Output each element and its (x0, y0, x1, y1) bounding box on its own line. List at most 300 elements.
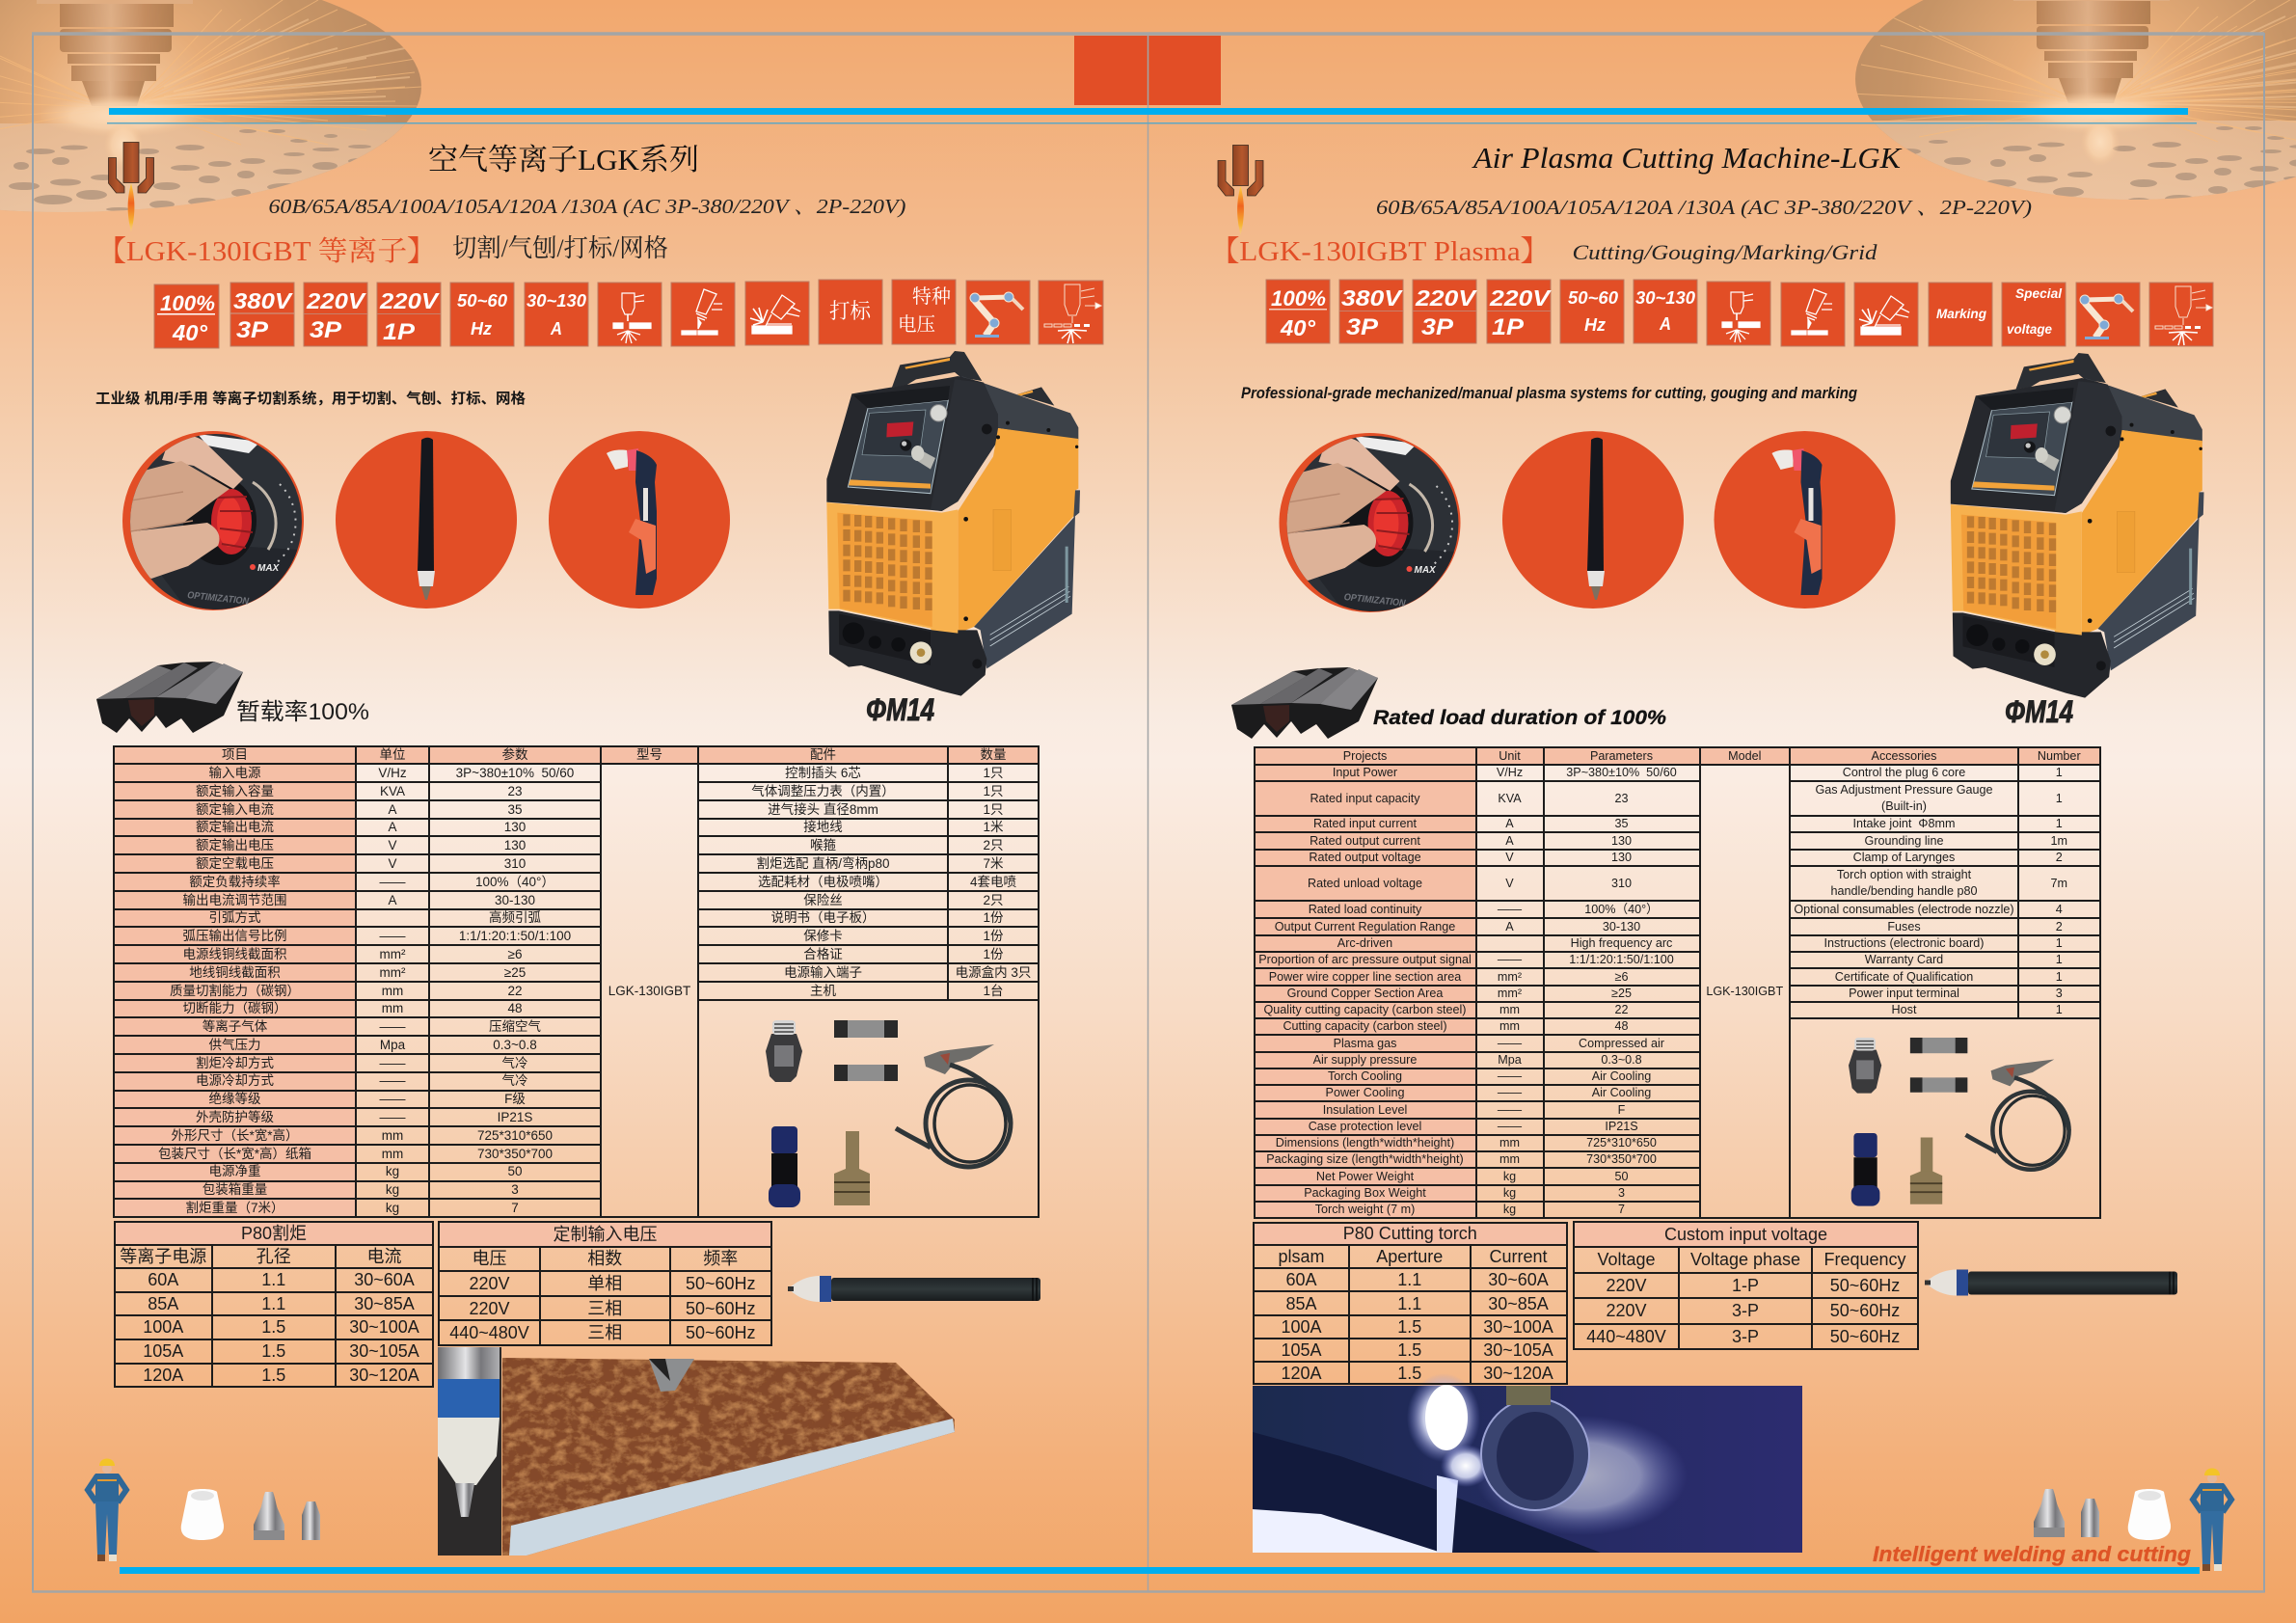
table: specifications Chinese: 额定输出电压 (196, 838, 274, 852)
table: specifications English: F (1618, 1103, 1625, 1117)
feature circle: knob left (122, 429, 309, 617)
table: custom voltage English: Custom input voltage (1664, 1225, 1827, 1244)
table: custom voltage Chinese: 相数 (587, 1249, 622, 1268)
table: specifications Chinese: 弧压输出信号比例 (183, 929, 287, 943)
table: specifications English: —— (1498, 1069, 1522, 1083)
table: specifications Chinese: 电源净重 (208, 1164, 260, 1178)
table: P80 torch Chinese (114, 1221, 434, 1388)
icon: 220V 3P: 3P (310, 317, 342, 343)
icon row left: duty cycle (154, 284, 219, 348)
table: specifications English: Power input terminal (1849, 987, 1959, 1000)
subtitle: English page: 60B/65A/85A/100A/105A/120A /130A (AC 3P-380/220V 、2P-220V) (1376, 196, 2032, 219)
table: specifications English: 1 (2056, 766, 2063, 779)
table: specifications Chinese: 1只 (983, 766, 1003, 780)
table: specifications English: Clamp of Larynges (1853, 851, 1955, 864)
table: custom voltage Chinese: 定制输入电压 (554, 1225, 658, 1244)
table: specifications English: Number (2038, 749, 2081, 763)
table: specifications Chinese: 割炬重量（7米） (185, 1201, 284, 1215)
table: custom voltage Chinese: 50~60Hz (686, 1323, 756, 1342)
table: specifications Chinese: 电源盒内 3只 (956, 965, 1031, 980)
table: specifications English: 2 (2056, 851, 2063, 864)
table: P80 torch English: 30~120A (1483, 1364, 1553, 1383)
table: specifications Chinese: mm (382, 1001, 403, 1015)
table: specifications Chinese: IP21S (498, 1110, 532, 1124)
table: specifications Chinese: 输出电流调节范围 (183, 893, 287, 907)
table: specifications Chinese: 保修卡 (803, 929, 843, 943)
table: specifications Chinese: 配件 (810, 747, 836, 762)
table: P80 torch English: 1.5 (1397, 1364, 1421, 1383)
table: specifications English: mm (1499, 1019, 1520, 1033)
table: specifications English: Cutting capacity (carbon steel) (1283, 1019, 1447, 1033)
icon: 220V 1P (1487, 280, 1552, 343)
table: specifications Chinese: A (388, 893, 397, 907)
table: specifications English: Output Current Regulation Range (1275, 920, 1455, 933)
icon: current range: 30~130 (527, 291, 586, 311)
table: P80 torch Chinese: 100A (143, 1317, 183, 1337)
table: specifications Chinese: —— (380, 1056, 405, 1070)
table: custom voltage English: 220V (1606, 1276, 1647, 1295)
table: specifications English: Case protection level (1309, 1120, 1421, 1133)
feature circle: hand torch right (1715, 431, 1896, 609)
table: P80 torch English: 100A (1281, 1317, 1322, 1337)
table: specifications English: (Built-in) (1881, 799, 1927, 813)
table: custom voltage Chinese: 440~480V (449, 1323, 529, 1342)
icon: robot arm (966, 281, 1030, 344)
table: P80 torch Chinese: 1.5 (261, 1317, 285, 1337)
cut steel blocks left (96, 662, 243, 733)
table: specifications English: Optional consumables (electrode nozzle) (1794, 903, 2014, 916)
table: specifications Chinese: 等离子气体 (203, 1019, 267, 1034)
table: custom voltage Chinese: 三相 (587, 1323, 622, 1342)
table: specifications Chinese: 7米 (983, 856, 1003, 871)
table: specifications English: kg (1503, 1203, 1516, 1216)
table: specifications Chinese: 35 (507, 802, 523, 817)
icon: 380V 3P: 380V (233, 288, 293, 313)
table: specifications English: High frequency arc (1571, 936, 1672, 950)
table: specifications English: Torch option with straight (1837, 868, 1971, 881)
table: P80 torch English (1253, 1222, 1568, 1385)
table: custom voltage Chinese (438, 1221, 772, 1346)
feature circle: straight torch right (1502, 431, 1684, 609)
table: specifications English: kg (1503, 1170, 1516, 1183)
table: specifications English: 130 (1611, 851, 1632, 864)
icon: gouging (1781, 283, 1845, 346)
slogan: Intelligent welding and cutting (1873, 1542, 2192, 1566)
table: P80 torch English: Aperture (1376, 1247, 1443, 1266)
table: specifications English: 130 (1611, 834, 1632, 848)
table: specifications Chinese: 气冷 (501, 1073, 528, 1088)
table: specifications English: Certificate of Qualification (1835, 970, 1973, 984)
table: specifications English: 7 (1618, 1203, 1625, 1216)
consumable: ceramic cup left (181, 1489, 224, 1540)
table: specifications English: Rated unload voltage (1308, 877, 1422, 890)
table: specifications English: 35 (1614, 817, 1628, 830)
title: Chinese: 空气等离子LGK系列 (428, 143, 699, 176)
table: specifications Chinese: 电源输入端子 (784, 965, 862, 980)
table: specifications English: —— (1498, 1037, 1522, 1050)
icon: grid cutting (2149, 283, 2213, 346)
table: specifications Chinese: Mpa (380, 1038, 405, 1052)
thin blue rule (107, 122, 2197, 123)
table: custom voltage English: 440~480V (1586, 1327, 1666, 1346)
table: specifications English: mm² (1498, 987, 1522, 1000)
photo: plasma cutting arc (1253, 1373, 1802, 1553)
table: specifications English: 1 (2056, 1003, 2063, 1016)
consumable: ceramic cup right (2128, 1489, 2171, 1540)
table: specifications Chinese: 1只 (983, 802, 1003, 817)
table: specifications Chinese: 控制插头 6芯 (785, 766, 861, 780)
icon: 220V 1P: 1P (383, 319, 416, 345)
icon: torch logo left (108, 143, 154, 232)
table: P80 torch English: 1.5 (1397, 1340, 1421, 1360)
table: specifications Chinese: 切断能力（碳钢） (183, 1001, 287, 1015)
table: specifications Chinese: 主机 (810, 984, 836, 997)
table: specifications Chinese: 2只 (983, 838, 1003, 852)
table: specifications English: —— (1498, 953, 1522, 966)
table: specifications Chinese: 割炬冷却方式 (196, 1056, 274, 1070)
table: P80 torch English: 30~100A (1483, 1317, 1553, 1337)
table: P80 torch English: plsam (1278, 1247, 1325, 1266)
table: specifications Chinese: F级 (504, 1092, 526, 1106)
table: specifications English: Torch Cooling (1328, 1069, 1402, 1083)
table: specifications English: 310 (1611, 877, 1632, 890)
table: specifications Chinese: 喉箍 (810, 838, 836, 852)
table: specifications English: 1 (2056, 817, 2063, 830)
icon row right: duty cycle: 40° (1280, 315, 1316, 340)
table: specifications Chinese: mm (382, 1147, 403, 1161)
table: specifications Chinese: 100%（40°） (475, 875, 554, 889)
table: P80 torch Chinese: 1.5 (261, 1341, 285, 1361)
table: P80 torch Chinese: 1.1 (261, 1294, 285, 1313)
table: specifications Chinese: 7 (511, 1201, 519, 1215)
table: custom voltage Chinese: 单相 (587, 1274, 622, 1293)
model heading: Chinese: 【LGK-130IGBT 等离子 】 (96, 235, 437, 267)
table: specifications Chinese: 电源冷却方式 (196, 1073, 274, 1088)
table: specifications English: V (1505, 877, 1514, 890)
icon: cutting (598, 283, 662, 346)
table: specifications English: Power wire copper line section area (1269, 970, 1461, 984)
table: P80 torch English: Current (1489, 1247, 1548, 1266)
table: specifications Chinese: 气体调整压力表（内置） (751, 784, 895, 798)
table: specifications Chinese: 48 (507, 1001, 523, 1015)
icon: 380V 3P (230, 283, 294, 346)
table: specifications Chinese: —— (380, 929, 405, 943)
icon: current range (525, 283, 588, 346)
bottom blue bar (120, 1567, 2200, 1574)
feature circle: hand torch left (549, 431, 730, 609)
table: specifications Chinese: 23 (507, 784, 523, 798)
table: custom voltage English (1573, 1221, 1919, 1350)
icon: current range (1634, 280, 1697, 343)
duty label Chinese: 暂载率100% (236, 699, 369, 725)
table: specifications Chinese: 外壳防护等级 (196, 1110, 274, 1124)
table: specifications English: —— (1498, 903, 1522, 916)
background photo: plasma torch sparks, left (0, 0, 421, 212)
icon: 220V 3P (304, 283, 367, 346)
table: specifications English: Mpa (1498, 1053, 1522, 1067)
table: specifications Chinese: ≥25 (504, 965, 526, 980)
table: specifications Chinese: —— (380, 1019, 405, 1034)
table: P80 torch English: P80 Cutting torch (1343, 1224, 1477, 1243)
table: specifications Chinese: —— (380, 1092, 405, 1106)
cut steel blocks right (1231, 667, 1378, 739)
table: specifications Chinese: 1份 (983, 947, 1003, 961)
table: P80 torch English: 60A (1285, 1270, 1317, 1289)
table: specifications English: A (1505, 920, 1514, 933)
table: P80 torch Chinese: 120A (143, 1366, 183, 1385)
machine left (826, 351, 1080, 696)
worker left (88, 1458, 126, 1561)
consumable: nozzle right (2034, 1489, 2065, 1537)
table: specifications English: 730*350*700 (1586, 1152, 1657, 1166)
table: P80 torch English: 30~105A (1483, 1340, 1553, 1360)
table: specifications English: Warranty Card (1865, 953, 1943, 966)
table: specifications Chinese: 引弧方式 (208, 910, 260, 925)
table: specifications Chinese: 额定负载持续率 (189, 875, 281, 889)
icon: current range: 30~130 (1635, 288, 1695, 308)
icon: marking (819, 280, 882, 344)
table: specifications Chinese: 说明书（电子板） (771, 910, 876, 925)
table: specifications English: mm (1499, 1152, 1520, 1166)
table: specifications English: Insulation Level (1323, 1103, 1407, 1117)
table: specifications English: ≥6 (1615, 970, 1628, 984)
model heading: English: 【LGK-130IGBT Plasma 】 (1209, 235, 1551, 267)
table: specifications Chinese: ≥6 (508, 947, 522, 961)
table: specifications Chinese: 1份 (983, 929, 1003, 943)
icon: 220V 1P: 1P (1492, 314, 1525, 340)
torch size label right: ΦM14 (2005, 694, 2073, 729)
subtitle: Chinese page: 60B/65A/85A/100A/105A/120A /130A (AC 3P-380/220V 、2P-220V) (268, 195, 906, 218)
accessories photo right (1849, 1038, 2069, 1206)
table: custom voltage Chinese: 频率 (703, 1249, 738, 1268)
table: specifications Chinese: 4套电喷 (970, 875, 1016, 889)
icon: current range: A (550, 319, 562, 338)
table: specifications English: 3 (1618, 1186, 1625, 1200)
table: specifications Chinese: mm (382, 984, 403, 997)
table: specifications English: 725*310*650 (1586, 1136, 1657, 1150)
table: specifications Chinese: kg (386, 1182, 399, 1197)
icon: frequency (1560, 280, 1624, 343)
icon: cutting (1707, 282, 1770, 345)
title: English: Air Plasma Cutting Machine-LGK (1472, 141, 1903, 175)
table: specifications Chinese: 1米 (983, 820, 1003, 834)
table: specifications English: Host (1892, 1003, 1916, 1016)
table: specifications English (1254, 746, 2101, 1219)
table: specifications Chinese: 130 (504, 820, 526, 834)
table: specifications English: —— (1498, 1120, 1522, 1133)
table: custom voltage Chinese: 50~60Hz (686, 1299, 756, 1318)
icon: 220V 3P: 220V (1415, 285, 1477, 311)
table: specifications English: 48 (1614, 1019, 1628, 1033)
table: P80 torch Chinese: 105A (143, 1341, 183, 1361)
table: custom voltage English: 3-P (1732, 1327, 1759, 1346)
table: specifications English: 30-130 (1603, 920, 1640, 933)
photo: cut steel plate (438, 1347, 955, 1555)
table: specifications Chinese: LGK-130IGBT (608, 984, 690, 997)
table: specifications Chinese: kg (386, 1201, 399, 1215)
torch photo left (788, 1276, 1040, 1302)
table: specifications Chinese: kg (386, 1164, 399, 1178)
top blue bar (109, 108, 2188, 115)
table: specifications Chinese: 1:1/1:20:1:50/1:100 (459, 929, 571, 943)
icon: arc (1854, 283, 1918, 346)
table: specifications Chinese: 1份 (983, 910, 1003, 925)
table: specifications English: V (1505, 851, 1514, 864)
centre red tab (1074, 36, 1221, 105)
caption: Chinese: 工业级 机用/手用 等离子切割系统，用于切割、气刨、打标、网格 (95, 390, 526, 407)
table: specifications English: Gas Adjustment Pressure Gauge (1815, 783, 1993, 797)
icon: 220V 3P: 220V (306, 288, 366, 313)
table: specifications Chinese: 额定输出电流 (196, 820, 274, 834)
table: custom voltage Chinese: 220V (469, 1299, 510, 1318)
table: P80 torch English: 1.1 (1397, 1270, 1421, 1289)
table: specifications English: 3 (2056, 987, 2063, 1000)
table: specifications Chinese: —— (380, 1073, 405, 1088)
table: specifications Chinese: 3 (511, 1182, 519, 1197)
table: specifications Chinese: 参数 (501, 747, 528, 762)
feature circle: straight torch left (336, 431, 517, 609)
icon: frequency: 50~60 (1568, 288, 1618, 308)
feature circle: knob right (1279, 431, 1466, 619)
table: specifications English: Intake joint Φ8mm (1853, 817, 1955, 830)
table: specifications Chinese: —— (380, 1110, 405, 1124)
table: P80 torch English: 120A (1281, 1364, 1322, 1383)
table: specifications English: mm (1499, 1136, 1520, 1150)
table: specifications Chinese: 绝缘等级 (208, 1092, 260, 1106)
function line: English: Cutting/Gouging/Marking/Grid (1572, 240, 1878, 264)
icon: 380V 3P: 380V (1341, 285, 1403, 311)
table: specifications English: 1 (2056, 792, 2063, 805)
table: specifications English: 4 (2056, 903, 2063, 916)
table: specifications Chinese: 气冷 (501, 1056, 528, 1070)
table: specifications Chinese: 130 (504, 838, 526, 852)
table: specifications English: Rated load continuity (1309, 903, 1421, 916)
table: custom voltage English: 50~60Hz (1830, 1301, 1900, 1320)
table: custom voltage Chinese: 三相 (587, 1299, 622, 1318)
table: specifications English: Grounding line (1865, 834, 1943, 848)
table: P80 torch English: 30~60A (1488, 1270, 1549, 1289)
table: specifications Chinese: 质量切割能力（碳钢） (170, 984, 300, 997)
table: specifications Chinese (113, 745, 1040, 1218)
table: specifications English: Accessories (1872, 749, 1936, 763)
table: specifications Chinese: 项目 (222, 747, 248, 762)
table: specifications English: Net Power Weight (1316, 1170, 1414, 1183)
table: specifications Chinese: 外形尺寸（长*宽*高） (171, 1128, 299, 1143)
table: specifications Chinese: 包装尺寸（长*宽*高）纸箱 (158, 1147, 311, 1161)
icon: frequency: 50~60 (457, 291, 507, 311)
worker right (2193, 1468, 2231, 1571)
consumable: electrode right (2081, 1499, 2099, 1537)
table: P80 torch Chinese: 1.1 (261, 1270, 285, 1289)
icon: arc (745, 282, 809, 345)
icon: frequency: Hz (1584, 315, 1606, 335)
table: specifications English: Rated output current (1310, 834, 1420, 848)
table: specifications English: Dimensions (length*width*height) (1276, 1136, 1454, 1150)
icon: 220V 3P (1413, 280, 1477, 343)
table: custom voltage English: 50~60Hz (1830, 1327, 1900, 1346)
table: specifications Chinese: 额定输入电流 (196, 802, 274, 817)
icon: 220V 1P (377, 283, 441, 346)
table: specifications Chinese: 选配耗材（电极喷嘴） (758, 875, 888, 889)
icon: special voltage: 电压 (898, 313, 935, 336)
table: custom voltage Chinese: 220V (469, 1274, 510, 1293)
table: specifications Chinese: 额定输入容量 (196, 784, 274, 798)
table: specifications English: Fuses (1887, 920, 1921, 933)
table: specifications Chinese: V (388, 838, 397, 852)
table: specifications Chinese: 地线铜线截面积 (189, 965, 281, 980)
icon: special voltage: Special (2015, 285, 2063, 301)
table: specifications Chinese: 730*350*700 (477, 1147, 553, 1161)
table: specifications English: Rated output voltage (1309, 851, 1421, 864)
table: P80 torch English: 1.5 (1397, 1317, 1421, 1337)
icon: 220V 3P: 3P (1421, 314, 1454, 340)
table: P80 torch Chinese: 电流 (366, 1247, 401, 1266)
table: specifications English: Plasma gas (1334, 1037, 1396, 1050)
icon row left: duty cycle: 100% (160, 291, 215, 315)
table: specifications Chinese: V/Hz (378, 766, 407, 780)
table: specifications Chinese: 310 (504, 856, 526, 871)
table: specifications Chinese: mm² (380, 947, 405, 961)
table: specifications English: 100%（40°） (1584, 903, 1659, 916)
consumable: nozzle left (254, 1492, 284, 1540)
table: specifications English: 1 (2056, 936, 2063, 950)
table: specifications Chinese: 进气接头 直径8mm (768, 802, 878, 817)
table: specifications English: Air Cooling (1592, 1069, 1651, 1083)
table: custom voltage English: 1-P (1732, 1276, 1759, 1295)
table: custom voltage English: Voltage phase (1690, 1250, 1800, 1269)
table: custom voltage English: 220V (1606, 1301, 1647, 1320)
table: P80 torch English: 1.1 (1397, 1294, 1421, 1313)
torch size label left: ΦM14 (866, 692, 934, 727)
table: P80 torch English: 105A (1281, 1340, 1322, 1360)
table: specifications English: handle/bending handle p80 (1831, 884, 1977, 898)
icon: marking (1929, 283, 1992, 346)
icon: torch logo right (1218, 145, 1263, 235)
table: specifications Chinese: 1只 (983, 784, 1003, 798)
table: specifications Chinese: 30-130 (495, 893, 535, 907)
table: P80 torch Chinese: 30~85A (354, 1294, 415, 1313)
table: specifications Chinese: 725*310*650 (477, 1128, 553, 1143)
table: specifications English: Instructions (electronic board) (1824, 936, 1984, 950)
table: specifications English: 7m (2050, 877, 2067, 890)
table: specifications English: Rated input capacity (1310, 792, 1420, 805)
table: specifications Chinese: 压缩空气 (489, 1019, 541, 1034)
table: specifications Chinese: 电源线铜线截面积 (183, 947, 287, 961)
icon: special voltage: voltage (2007, 321, 2052, 337)
table: specifications English: kg (1503, 1186, 1516, 1200)
table: specifications English: Packaging size (length*width*height) (1266, 1152, 1464, 1166)
table: specifications English: Compressed air (1579, 1037, 1664, 1050)
table: specifications English: mm² (1498, 970, 1522, 984)
table: specifications English: 1m (2050, 834, 2067, 848)
table: specifications English: Model (1728, 749, 1761, 763)
machine right (1951, 353, 2203, 698)
table: specifications English: 1 (2056, 970, 2063, 984)
table: specifications English: Air supply pressure (1313, 1053, 1417, 1067)
consumable: electrode left (302, 1501, 320, 1540)
table: P80 torch Chinese: 30~100A (349, 1317, 419, 1337)
table: specifications English: Proportion of arc pressure output signal (1258, 953, 1472, 966)
table: specifications Chinese: A (388, 820, 397, 834)
table: specifications English: —— (1498, 1086, 1522, 1099)
table: specifications Chinese: 型号 (636, 747, 662, 762)
icon: frequency (450, 283, 514, 346)
icon row left: duty cycle: 40° (172, 320, 208, 345)
table: specifications Chinese: 接地线 (803, 820, 843, 834)
table: specifications English: Arc-driven (1337, 936, 1392, 950)
table: specifications English: Unit (1499, 749, 1521, 763)
table: custom voltage Chinese: 50~60Hz (686, 1274, 756, 1293)
